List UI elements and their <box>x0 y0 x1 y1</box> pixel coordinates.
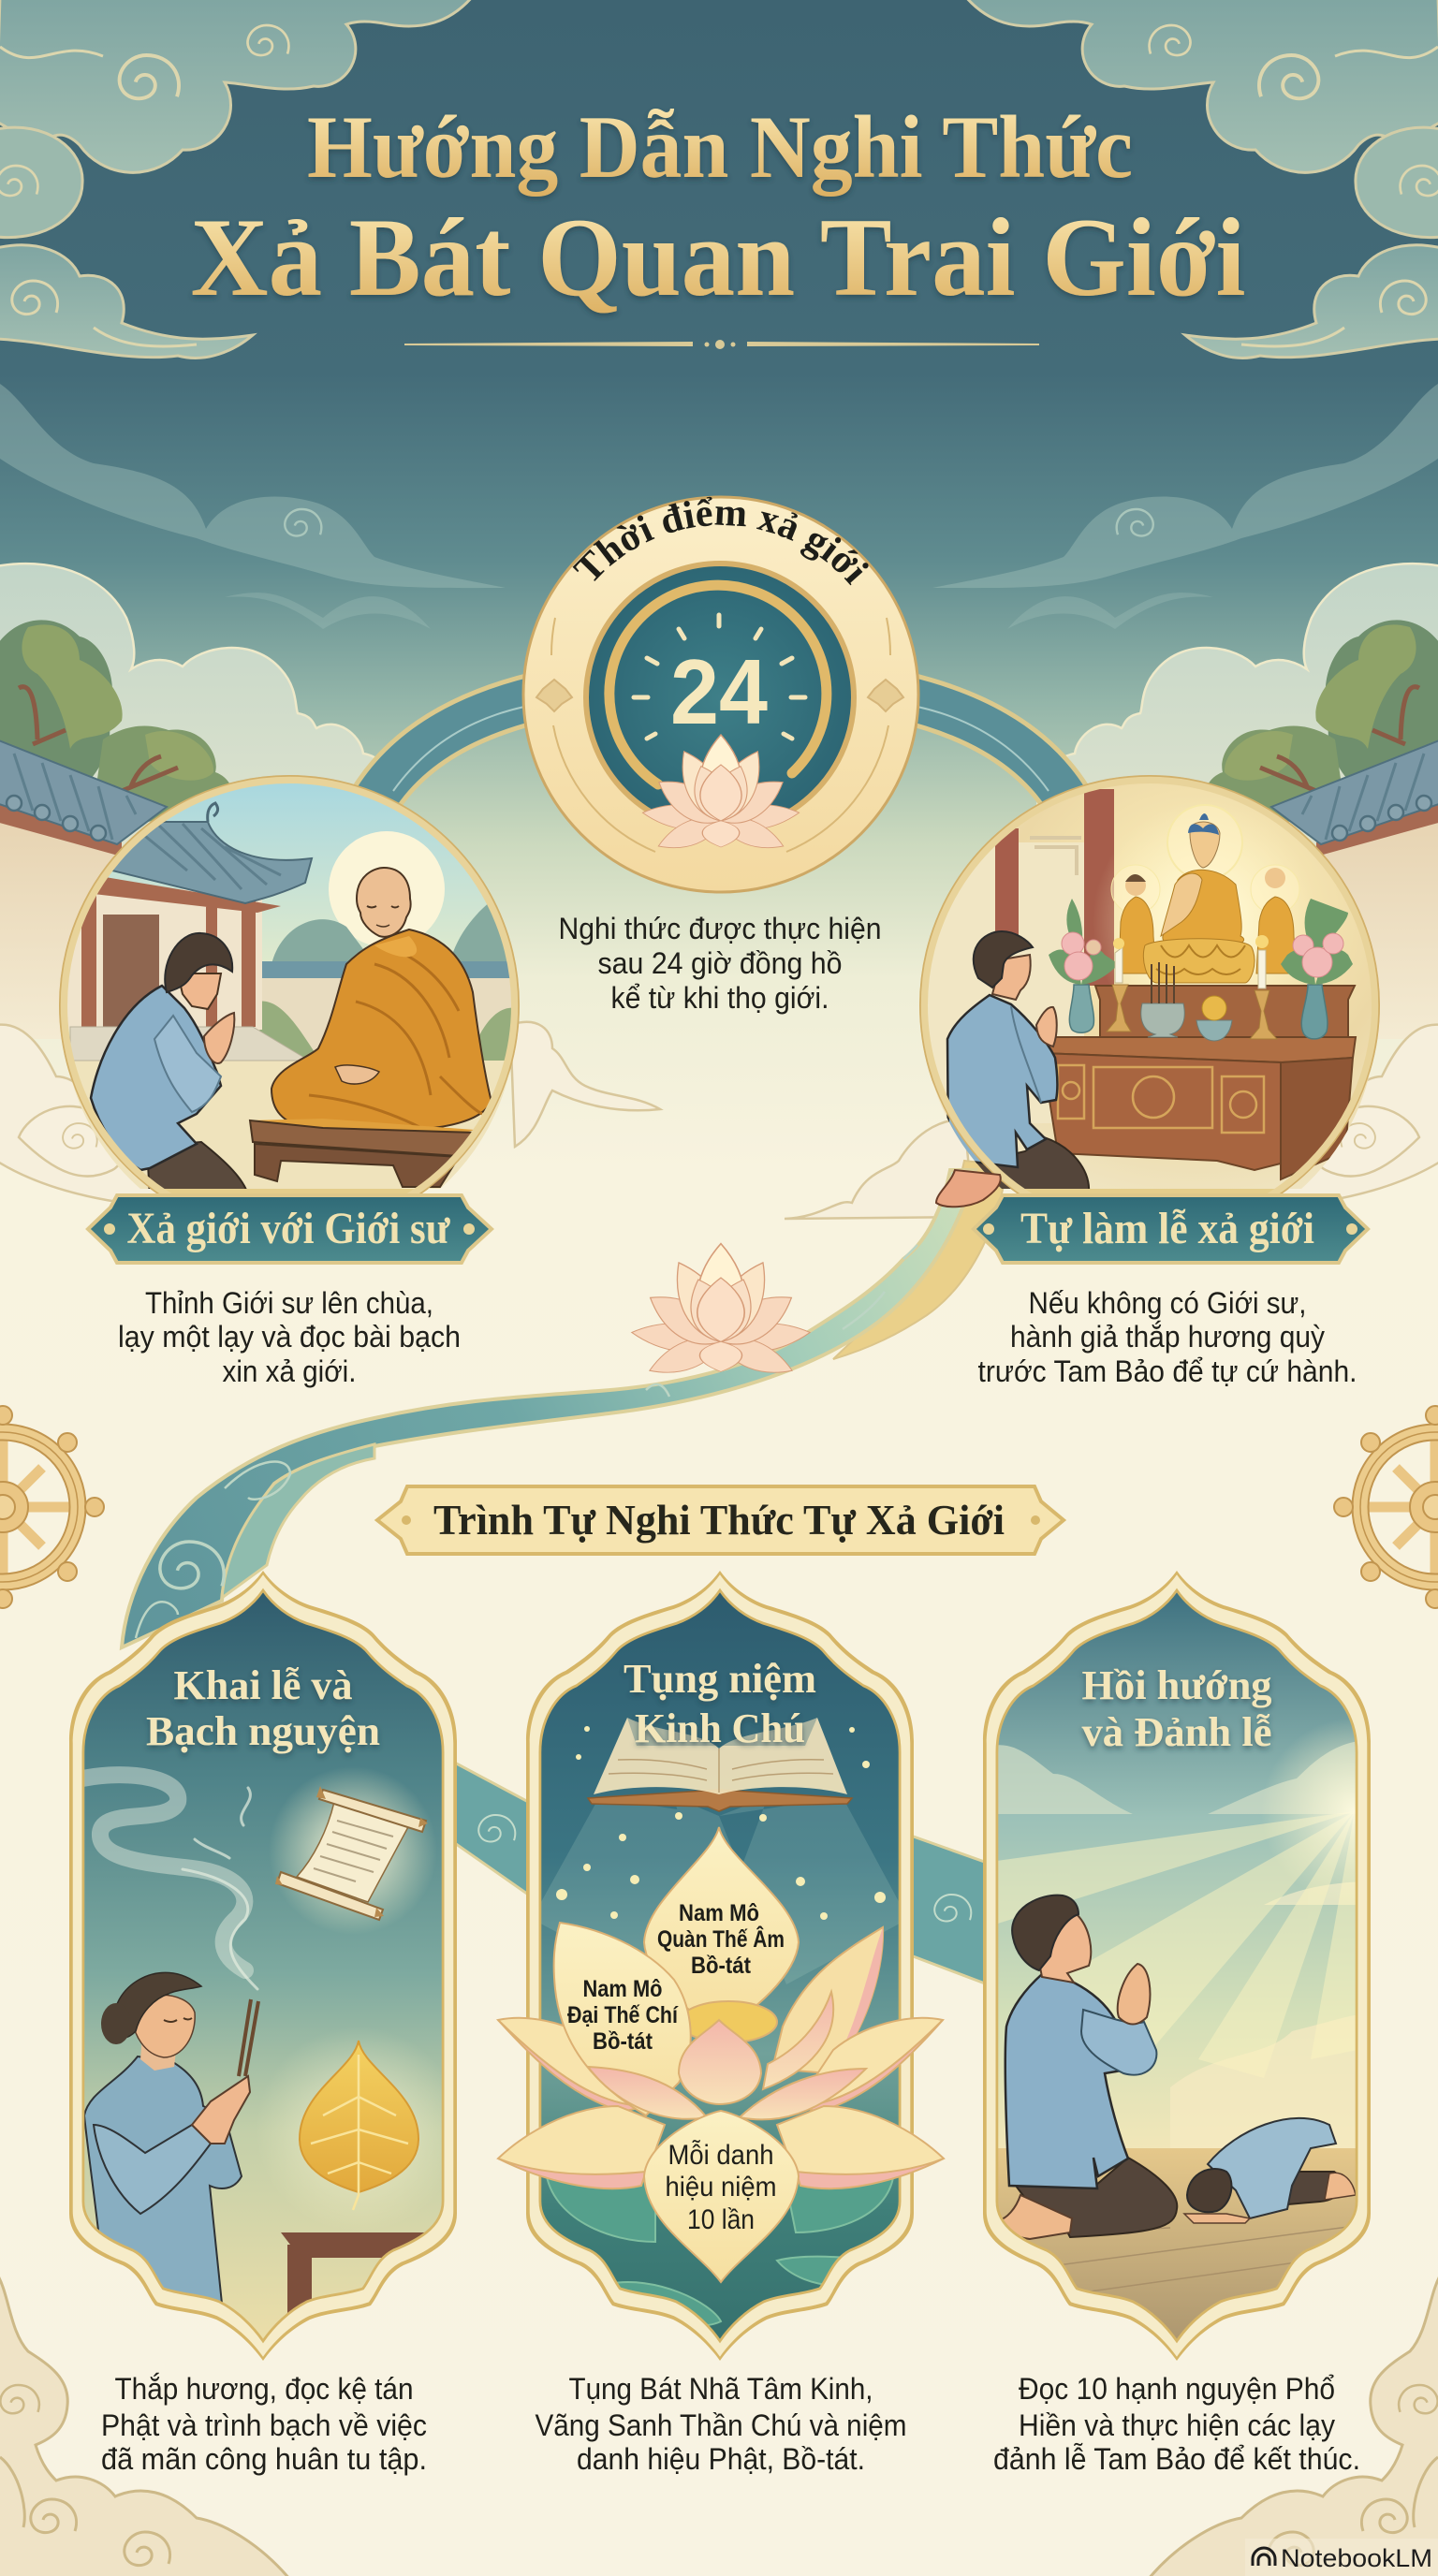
mantra: Quan The Am: Quàn Thế Âm <box>657 1925 785 1953</box>
text: with preceptor: xin xả giới. <box>223 1354 356 1388</box>
ribbon segments between step cards <box>449 1760 992 1986</box>
text: self ceremony: hành giả thắp hương quỳ <box>1010 1320 1325 1354</box>
mantra: Quan The Am <box>657 1900 785 1979</box>
ornament left <box>536 680 572 711</box>
text: step 3: Đọc 10 hạnh nguyện Phổ <box>1019 2372 1335 2406</box>
text: step 1: Phật và trình bạch về việc <box>101 2408 427 2442</box>
panel: self ceremony scene <box>919 775 1380 1193</box>
large lotus with mantras <box>498 1827 944 2282</box>
medallion description: kể từ khi thọ giới. <box>610 981 829 1015</box>
sun rays <box>998 1814 1356 2063</box>
dharma wheel left <box>0 1406 104 1608</box>
step 2 title <box>624 1656 816 1751</box>
icon: lotus on ribbon <box>630 1244 812 1383</box>
text: with preceptor: Thỉnh Giới sư lên chùa, <box>145 1286 433 1320</box>
cream clouds right <box>785 1025 1438 1219</box>
section heading banner: Trình Tự Nghi Thức Tự Xả Giới <box>433 1496 1005 1544</box>
step 1 title: Bạch nguyện <box>146 1708 380 1754</box>
step 3 title <box>1082 1662 1271 1755</box>
step 2 title: Tụng niệm <box>624 1656 816 1702</box>
title <box>191 97 1245 319</box>
label: self ceremony <box>974 1195 1368 1263</box>
mantra: Quan The Am: Bồ-tát <box>691 1953 752 1979</box>
watermark: NotebookLM <box>1245 2539 1438 2576</box>
title: Xả Bát Quan Trai Giới <box>191 195 1245 319</box>
side table <box>281 2232 424 2313</box>
text: step 1: đã mãn công huân tu tập. <box>101 2442 427 2476</box>
label: with preceptor <box>88 1195 492 1263</box>
person bowing <box>1184 2118 1356 2223</box>
open book <box>588 1718 852 1811</box>
ornament right <box>868 680 903 711</box>
corner cloud bottom right <box>1148 2273 1438 2576</box>
mantra: Dai The Chi: Đại Thế Chí <box>567 2002 679 2028</box>
top cloud frame right <box>965 0 1438 358</box>
floor <box>998 2148 1356 2338</box>
cream clouds left <box>0 1022 660 1208</box>
altar <box>1042 986 1356 1179</box>
text: self ceremony: Nếu không có Giới sư, <box>1028 1286 1307 1320</box>
altar offerings <box>1049 899 1353 1041</box>
text: step 3: đảnh lễ Tam Bảo để kết thúc. <box>993 2442 1360 2476</box>
Buddha statues <box>1111 805 1299 983</box>
text: step 2: Vãng Sanh Thần Chú và niệm <box>536 2408 906 2442</box>
corner cloud bottom left <box>0 2273 290 2576</box>
curved heading: Thời điểm xả giới <box>573 496 869 586</box>
step 3 title: Hồi hướng <box>1082 1662 1271 1708</box>
incense smoke <box>82 1775 257 1989</box>
repeat note: hiệu niệm <box>665 2172 777 2203</box>
step 2 title: Kinh Chú <box>635 1705 805 1751</box>
label: self ceremony: Tự làm lễ xả giới <box>1020 1204 1314 1253</box>
step 1 title: Khai lễ và <box>174 1662 352 1708</box>
kneeling man facing altar <box>947 931 1089 1193</box>
medallion description <box>558 912 882 1015</box>
bodhi leaf icon <box>276 2040 441 2211</box>
number 24: 24 <box>670 640 768 743</box>
decorative sky clouds right <box>932 384 1438 936</box>
roof and wall left <box>0 739 167 1039</box>
panel: step 1 <box>66 1571 462 2368</box>
text: self ceremony <box>977 1286 1357 1388</box>
text: with preceptor: lạy một lạy và đọc bài bạch <box>118 1320 461 1354</box>
mantra: Quan The Am: Nam Mô <box>679 1900 759 1926</box>
text: step 2: danh hiệu Phật, Bồ-tát. <box>577 2442 865 2476</box>
mantra: Dai The Chi <box>567 1976 679 2055</box>
kneeling man <box>91 933 249 1198</box>
roof and wall right <box>1271 739 1438 1039</box>
medallion description: Nghi thức được thực hiện <box>558 912 882 945</box>
scroll icon <box>273 1771 433 1929</box>
dharma wheel right <box>1334 1406 1438 1608</box>
text: step 2 <box>536 2372 906 2476</box>
label: with preceptor: Xả giới với Giới sư <box>127 1204 451 1253</box>
text: with preceptor <box>118 1286 461 1388</box>
repeat note: Mỗi danh <box>668 2140 773 2171</box>
text: self ceremony: trước Tam Bảo để tự cứ hành. <box>977 1354 1357 1388</box>
lily pads <box>546 2167 899 2325</box>
mantra: Dai The Chi: Nam Mô <box>582 1976 663 2002</box>
arch ribbons from the medallion <box>374 697 1067 800</box>
text: step 3 <box>993 2372 1360 2476</box>
watermark: NotebookLM: NotebookLM <box>1281 2544 1432 2572</box>
text: step 2: Tụng Bát Nhã Tâm Kinh, <box>569 2372 873 2406</box>
text: step 1 <box>101 2372 427 2476</box>
clock face <box>586 564 854 831</box>
title divider ornament <box>404 340 1039 349</box>
panel: timing medallion <box>522 496 919 893</box>
text: step 3: Hiền và thực hiện các lạy <box>1019 2408 1335 2442</box>
panel: step 3 <box>983 1571 1371 2361</box>
light rays <box>532 1797 908 1984</box>
monk <box>250 868 492 1187</box>
icon: feet of kneeling man <box>936 1170 1001 1207</box>
repeat note <box>665 2140 777 2235</box>
panel: scene with preceptor <box>59 775 520 1193</box>
title: Hướng Dẫn Nghi Thức <box>307 97 1133 197</box>
lotus on medallion <box>641 735 800 857</box>
sparkles <box>556 1726 886 1920</box>
woman with incense <box>84 1972 258 2331</box>
man praying <box>999 1895 1177 2239</box>
decorative sky clouds left <box>0 384 506 936</box>
clouds <box>992 1740 1376 1905</box>
repeat note: 10 lần <box>687 2204 755 2235</box>
step 1 title <box>146 1662 380 1754</box>
step 3 title: và Đảnh lễ <box>1082 1709 1271 1755</box>
panel: step 2 <box>498 1571 944 2368</box>
section heading banner <box>377 1486 1064 1554</box>
flowing ribbon <box>122 1161 1006 1647</box>
mantra: Dai The Chi: Bồ-tát <box>593 2028 653 2055</box>
top cloud frame left <box>0 0 473 358</box>
medallion description: sau 24 giờ đồng hồ <box>597 946 843 980</box>
text: step 1: Thắp hương, đọc kệ tán <box>114 2372 414 2406</box>
